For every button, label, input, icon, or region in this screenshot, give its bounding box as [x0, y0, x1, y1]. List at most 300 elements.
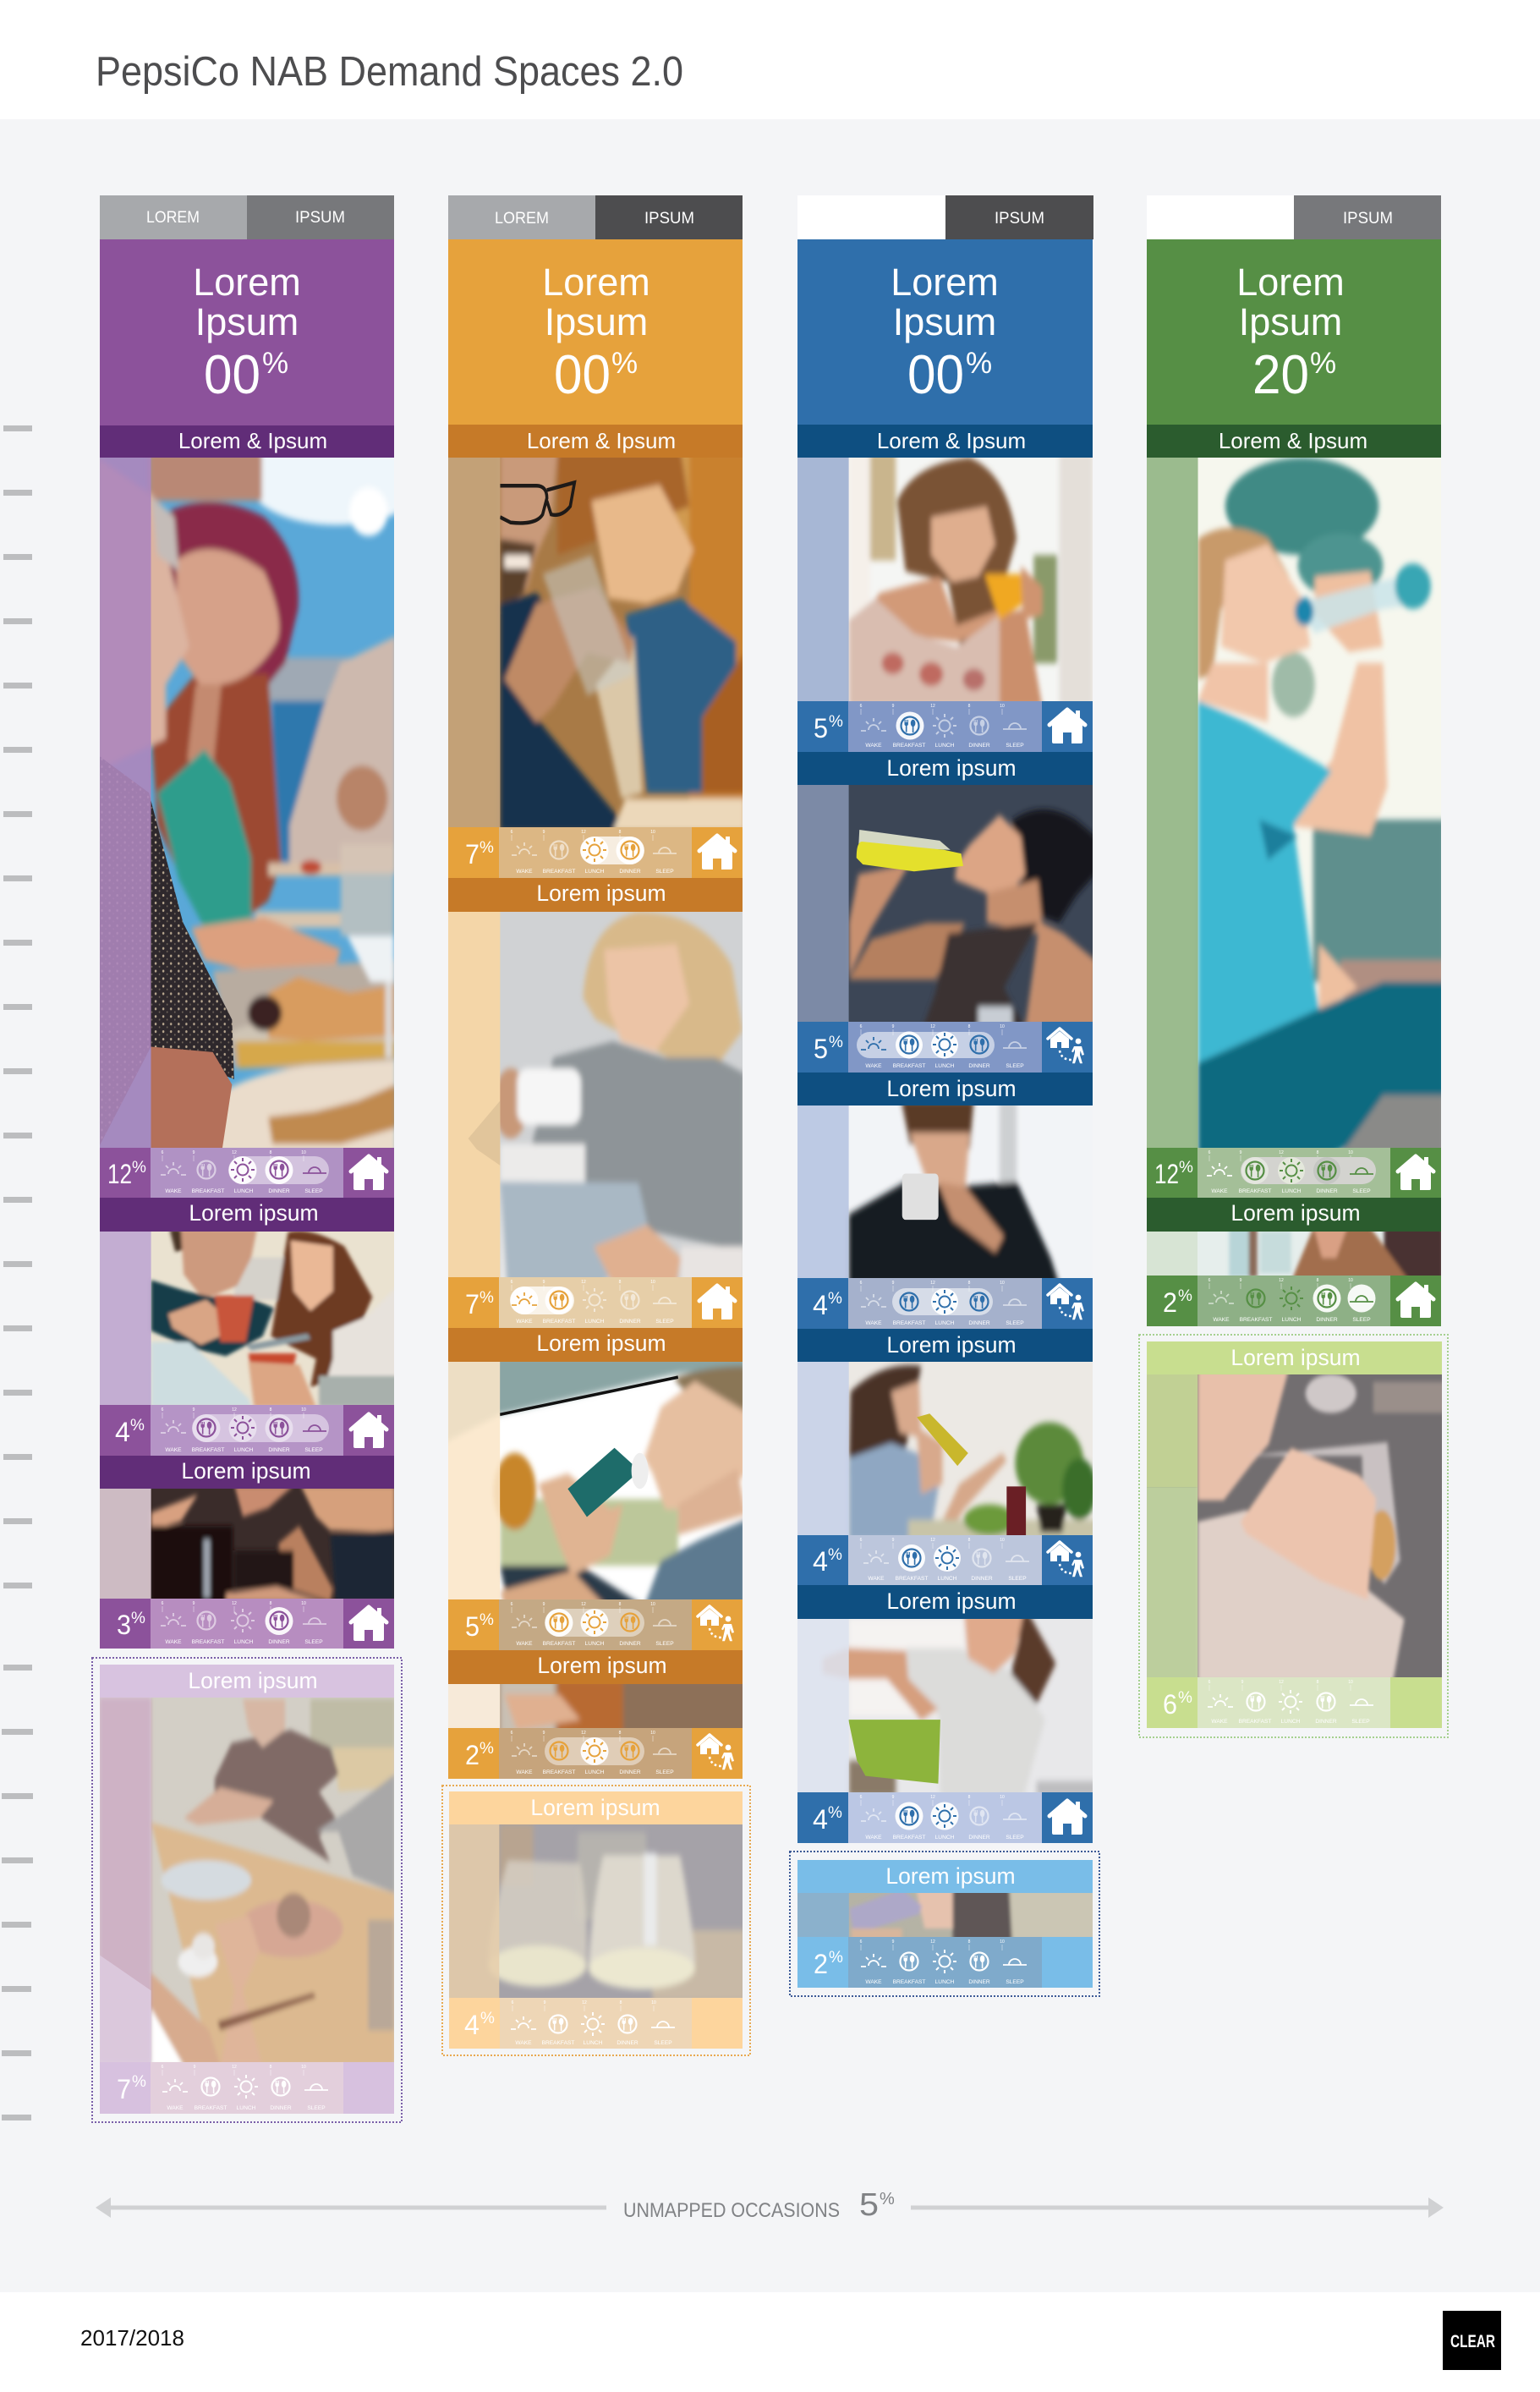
time bar 5%: DINNER: [968, 1063, 990, 1069]
time bar 5%: LUNCH: [585, 1641, 605, 1647]
time bar 7%: 7: [465, 1289, 480, 1319]
time bar 12%: 12: [232, 1150, 237, 1155]
time bar 5%: [448, 1599, 743, 1650]
time bar 2%: 8: [1317, 1278, 1319, 1283]
time bar 3%: LUNCH: [234, 1639, 254, 1645]
time bar 2%: 9: [543, 1731, 545, 1736]
sub heading band: Lorem & Ipsum: [178, 428, 327, 453]
time bar 7%: SLEEP: [655, 869, 674, 875]
time bar 5%: WAKE: [865, 1063, 882, 1069]
top band: Lorem ipsum: [1230, 1345, 1361, 1370]
time bar 7%: BREAKFAST: [543, 869, 575, 875]
band: [448, 1328, 743, 1362]
time bar 7%: SLEEP: [307, 2105, 326, 2111]
time bar 4%: [100, 1405, 394, 1456]
time bar 7%: 9: [194, 2065, 196, 2070]
time bar 4%: 9: [892, 1538, 895, 1543]
time bar 7%: 8: [619, 830, 622, 835]
time bar 5%: 9: [892, 704, 895, 709]
time bar 12%: 12: [1154, 1159, 1179, 1189]
band: [797, 1073, 1093, 1105]
time bar 4%: 8: [968, 1538, 971, 1543]
time bar 4%: 12: [930, 1795, 935, 1800]
time bar 5%: SLEEP: [1006, 1063, 1024, 1069]
time bar 4%: [797, 1535, 1093, 1585]
time bar 2%: 10: [650, 1731, 655, 1736]
band: [797, 752, 1093, 785]
time bar 7%: [448, 827, 743, 878]
top band: Lorem ipsum: [530, 1795, 660, 1820]
time bar 4%: LUNCH: [935, 1320, 955, 1326]
time bar 12%: LUNCH: [234, 1188, 254, 1194]
photo: iced drink in hand: [448, 1684, 743, 1728]
time bar 2%: LUNCH: [1282, 1317, 1302, 1323]
time bar 5%: 9: [543, 1602, 545, 1607]
arrow right: [911, 2197, 1444, 2218]
photo: woman in car with cup: [448, 1362, 743, 1599]
time bar 4%: LUNCH: [584, 2040, 603, 2046]
time bar 3%: SLEEP: [304, 1639, 323, 1645]
photo: woman with tablet and cup: [448, 912, 743, 1277]
top band: [100, 1665, 394, 1698]
top band: [1147, 1341, 1442, 1374]
time bar 7%: [100, 2062, 394, 2114]
time bar 5%: 12: [930, 704, 935, 709]
photo: woman drinking bottled water: [1147, 458, 1441, 1148]
heading block: 00: [907, 343, 964, 405]
time bar 4%: LUNCH: [938, 1576, 957, 1582]
time bar 4%: BREAKFAST: [893, 1835, 925, 1841]
time bar 2%: %: [829, 1949, 843, 1967]
time bar 4%: SLEEP: [304, 1447, 323, 1453]
time bar 7%: 6: [511, 1280, 513, 1285]
time bar 3%: 10: [301, 1601, 306, 1606]
unmapped occasions label: [623, 2187, 895, 2223]
top band: Lorem ipsum: [188, 1668, 318, 1693]
time bar 5%: [797, 701, 1093, 752]
band: Lorem ipsum: [536, 1330, 666, 1356]
time bar 7%: DINNER: [619, 1319, 641, 1325]
time bar 4%: 4: [813, 1804, 828, 1835]
sub heading band: [1147, 425, 1441, 458]
time bar 12%: [100, 1148, 394, 1198]
time bar 2%: DINNER: [1316, 1317, 1338, 1323]
time bar 4%: 12: [930, 1281, 935, 1286]
title: PepsiCo NAB Demand Spaces 2.0: [96, 49, 683, 95]
time bar 12%: DINNER: [268, 1188, 290, 1194]
time bar 6%: DINNER: [1315, 1719, 1337, 1725]
band: Lorem ipsum: [1230, 1200, 1361, 1226]
time bar 3%: 3: [117, 1610, 131, 1640]
band: Lorem ipsum: [886, 1332, 1017, 1358]
time bar 12%: 6: [162, 1150, 164, 1155]
time bar 2%: 8: [968, 1939, 971, 1945]
photo: cafe table: [100, 1698, 394, 2062]
time bar 3%: 9: [193, 1601, 195, 1606]
time bar 2%: [448, 1728, 743, 1779]
time bar 2%: %: [1178, 1287, 1192, 1305]
footer background: [0, 2292, 1540, 2392]
time bar 4%: BREAKFAST: [896, 1576, 928, 1582]
time bar 7%: 10: [650, 830, 655, 835]
photo: woman with orange juice: [797, 458, 1093, 701]
photo: wine glasses: [449, 1824, 743, 1998]
time bar 12%: [1147, 1148, 1441, 1198]
tabs: IPSUM: [295, 208, 345, 227]
time bar 4%: 10: [1000, 1538, 1005, 1543]
tabs: LOREM: [146, 208, 200, 227]
time bar 4%: BREAKFAST: [192, 1447, 224, 1453]
time bar 5%: 10: [1000, 1024, 1005, 1029]
time bar 5%: 12: [930, 1024, 935, 1029]
time bar 2%: [1147, 1276, 1441, 1326]
time bar 6%: BREAKFAST: [1239, 1719, 1271, 1725]
time bar 6%: 8: [1317, 1680, 1319, 1685]
time bar 7%: WAKE: [167, 2105, 184, 2111]
column 4: green: [1127, 195, 1451, 1737]
arrow left: [96, 2197, 606, 2218]
time bar 4%: 9: [544, 2000, 546, 2005]
time bar 12%: 9: [1240, 1150, 1242, 1155]
photo: man with glasses drinking water: [448, 458, 743, 827]
heading block: 20: [1252, 343, 1309, 405]
time bar 7%: 12: [581, 1280, 586, 1285]
time bar 7%: 9: [543, 830, 545, 835]
time bar 4%: 4: [813, 1290, 828, 1320]
time bar 4%: SLEEP: [1006, 1835, 1024, 1841]
time bar 2%: WAKE: [865, 1979, 882, 1985]
time bar 12%: 6: [1208, 1150, 1211, 1155]
time bar 4%: 4: [464, 2010, 480, 2040]
time bar 7%: %: [480, 1289, 494, 1307]
time bar 7%: 8: [619, 1280, 622, 1285]
time bar 12%: %: [132, 1159, 146, 1177]
time bar 6%: 6: [1208, 1680, 1211, 1685]
time bar 12%: BREAKFAST: [192, 1188, 224, 1194]
time bar 2%: BREAKFAST: [893, 1979, 925, 1985]
time bar 2%: 12: [581, 1731, 586, 1736]
time bar 12%: SLEEP: [304, 1188, 323, 1194]
time bar 4%: WAKE: [515, 2040, 532, 2046]
time bar 5%: 10: [1000, 704, 1005, 709]
time bar 4%: 10: [1000, 1795, 1005, 1800]
time bar 7%: 6: [511, 830, 513, 835]
time bar 7%: 12: [581, 830, 586, 835]
time bar 4%: LUNCH: [935, 1835, 955, 1841]
time bar 2%: WAKE: [1213, 1317, 1230, 1323]
footer year: 2017/2018: [80, 2325, 184, 2351]
time bar 2%: 9: [892, 1939, 895, 1945]
time bar 7%: LUNCH: [585, 1319, 605, 1325]
heading block: %: [611, 347, 638, 380]
time bar 5%: LUNCH: [935, 1063, 955, 1069]
time bar 12%: 10: [1348, 1150, 1353, 1155]
time bar 7%: LUNCH: [585, 869, 605, 875]
time bar 3%: [100, 1599, 394, 1649]
time bar 2%: BREAKFAST: [543, 1769, 575, 1775]
heading block: Ipsum: [1239, 300, 1342, 343]
column 3: blue: [780, 195, 1105, 1996]
time bar 6%: 10: [1348, 1680, 1353, 1685]
sub heading band: [100, 425, 394, 458]
tabs: [1147, 195, 1441, 239]
time bar 4%: WAKE: [165, 1447, 182, 1453]
time bar 2%: LUNCH: [935, 1979, 955, 1985]
band: [100, 1456, 394, 1489]
time bar 4%: 9: [892, 1281, 895, 1286]
time bar 5%: 12: [581, 1602, 586, 1607]
time bar 4%: 8: [968, 1795, 971, 1800]
time bar 3%: %: [131, 1610, 145, 1627]
time bar 7%: BREAKFAST: [195, 2105, 227, 2111]
column 1: purple: [85, 195, 426, 2122]
time bar 2%: DINNER: [619, 1769, 641, 1775]
heading block: [100, 239, 394, 425]
time bar 5%: 8: [968, 704, 971, 709]
time bar 12%: WAKE: [165, 1188, 182, 1194]
time bar 7%: WAKE: [516, 1319, 533, 1325]
time bar 4%: %: [828, 1290, 842, 1308]
time bar 4%: [797, 1792, 1093, 1843]
photo: couple with mugs: [100, 1232, 394, 1405]
time bar 7%: DINNER: [270, 2105, 292, 2111]
time bar 12%: 12: [1279, 1150, 1284, 1155]
unmapped occasions label: %: [880, 2190, 895, 2208]
column 2: orange: [425, 195, 766, 2055]
time bar 5%: %: [829, 713, 843, 731]
time bar 4%: WAKE: [868, 1576, 885, 1582]
time bar 4%: 10: [651, 2000, 656, 2005]
unmapped occasions label: 5: [859, 2187, 879, 2223]
time bar 4%: DINNER: [968, 1835, 990, 1841]
time bar 12%: 9: [193, 1150, 195, 1155]
time bar 4%: DINNER: [268, 1447, 290, 1453]
heading block: %: [1310, 347, 1336, 380]
time bar 2%: [797, 1937, 1093, 1988]
photo: friends with straws: [100, 1489, 394, 1599]
time bar 2%: 10: [1000, 1939, 1005, 1945]
band: [448, 878, 743, 912]
time bar 5%: 5: [465, 1611, 480, 1642]
time bar 12%: 8: [1317, 1150, 1319, 1155]
time bar 12%: 8: [270, 1150, 272, 1155]
dashed group: out of home: [1139, 1335, 1450, 1737]
time bar 6%: 9: [1241, 1680, 1244, 1685]
time bar 4%: 9: [892, 1795, 895, 1800]
time bar 2%: SLEEP: [655, 1769, 674, 1775]
time bar 5%: %: [829, 1034, 843, 1051]
top band: Lorem ipsum: [885, 1863, 1016, 1889]
time bar 5%: BREAKFAST: [543, 1641, 575, 1647]
dashed group: out of home: [440, 1786, 750, 2055]
time bar 4%: LUNCH: [234, 1447, 254, 1453]
time bar 4%: 12: [232, 1407, 237, 1413]
time bar 2%: 9: [1240, 1278, 1242, 1283]
heading block: Ipsum: [893, 300, 996, 343]
photo: woman pouring green smoothie: [797, 1619, 1093, 1792]
time bar 2%: 6: [511, 1731, 513, 1736]
time bar 4%: DINNER: [968, 1320, 990, 1326]
time bar 4%: 6: [512, 2000, 514, 2005]
time bar 4%: DINNER: [617, 2040, 638, 2046]
time bar 2%: DINNER: [968, 1979, 990, 1985]
time bar 7%: DINNER: [619, 869, 641, 875]
time bar 4%: [797, 1278, 1093, 1329]
band: [100, 1198, 394, 1232]
time bar 4%: 4: [115, 1417, 130, 1447]
band: Lorem ipsum: [189, 1200, 319, 1226]
time bar 5%: DINNER: [968, 743, 990, 749]
heading block: 00: [554, 343, 611, 405]
time bar 6%: LUNCH: [1281, 1719, 1301, 1725]
time bar 4%: 12: [582, 2000, 587, 2005]
sub heading band: Lorem & Ipsum: [1219, 428, 1367, 453]
sub heading band: Lorem & Ipsum: [877, 428, 1026, 453]
time bar 4%: BREAKFAST: [542, 2040, 574, 2046]
time bar 4%: WAKE: [865, 1835, 882, 1841]
time bar 2%: WAKE: [516, 1769, 533, 1775]
photo: woman with smoothie and plants: [797, 1362, 1093, 1535]
time bar 2%: 2: [814, 1949, 828, 1979]
time bar 7%: [448, 1277, 743, 1328]
time bar 5%: 9: [892, 1024, 895, 1029]
time bar 2%: 2: [465, 1740, 480, 1770]
top band: [797, 1860, 1093, 1893]
photo: dinner table: [100, 458, 394, 1148]
time bar 7%: WAKE: [516, 869, 533, 875]
time bar 4%: 10: [1000, 1281, 1005, 1286]
time bar 5%: WAKE: [516, 1641, 533, 1647]
time bar 4%: %: [828, 1804, 842, 1822]
band: Lorem ipsum: [181, 1458, 311, 1484]
time bar 5%: %: [480, 1611, 494, 1629]
band: [797, 1585, 1093, 1619]
time bar 5%: SLEEP: [655, 1641, 674, 1647]
top band: [449, 1791, 743, 1824]
sub heading band: Lorem & Ipsum: [527, 428, 676, 453]
time bar 4%: SLEEP: [654, 2040, 672, 2046]
tabs: [448, 195, 743, 239]
time bar 7%: %: [480, 839, 494, 857]
photo: woman with yellow sports drink: [797, 785, 1093, 1022]
time bar 7%: LUNCH: [237, 2105, 256, 2111]
time bar 4%: 9: [193, 1407, 195, 1413]
heading block: Ipsum: [545, 300, 648, 343]
time bar 7%: 10: [650, 1280, 655, 1285]
band: Lorem ipsum: [536, 881, 666, 906]
time bar 7%: 9: [543, 1280, 545, 1285]
heading block: [797, 239, 1093, 425]
time bar 2%: SLEEP: [1352, 1317, 1371, 1323]
time bar 5%: 10: [650, 1602, 655, 1607]
band: [1147, 1198, 1441, 1232]
tabs: [100, 195, 394, 239]
time bar 5%: BREAKFAST: [893, 743, 925, 749]
time bar 12%: SLEEP: [1352, 1188, 1371, 1194]
band: [448, 1650, 743, 1684]
time bar 5%: 6: [860, 704, 863, 709]
heading block: Lorem: [891, 261, 999, 304]
dashed group: out of home: [789, 1852, 1099, 1996]
time bar 2%: 10: [1348, 1278, 1353, 1283]
heading block: [1147, 239, 1441, 425]
time bar 7%: %: [132, 2073, 146, 2091]
time bar 4%: %: [480, 2010, 495, 2027]
sub heading band: [448, 425, 743, 458]
time bar 4%: 6: [162, 1407, 164, 1413]
dashed group: out of home: [85, 1658, 409, 2122]
heading block: Ipsum: [195, 300, 299, 343]
time bar 2%: 12: [1279, 1278, 1284, 1283]
time bar 7%: 7: [465, 839, 480, 870]
band: Lorem ipsum: [886, 1076, 1017, 1101]
band: Lorem ipsum: [886, 1588, 1017, 1614]
time bar 12%: 12: [107, 1159, 132, 1189]
time bar 5%: 8: [619, 1602, 622, 1607]
time bar 12%: WAKE: [1211, 1188, 1228, 1194]
time bar 3%: BREAKFAST: [192, 1639, 224, 1645]
time bar 7%: 6: [162, 2065, 164, 2070]
time bar 5%: 6: [511, 1602, 513, 1607]
time bar 6%: 6: [1163, 1689, 1177, 1720]
time bar 5%: 5: [814, 1034, 828, 1064]
time bar 3%: 8: [270, 1601, 272, 1606]
time bar 5%: BREAKFAST: [893, 1063, 925, 1069]
logo: CLEAR: [1443, 2311, 1501, 2370]
time bar 6%: SLEEP: [1351, 1719, 1370, 1725]
time bar 4%: %: [130, 1417, 145, 1435]
time bar 3%: WAKE: [165, 1639, 182, 1645]
header background: [0, 0, 1540, 119]
time bar 4%: 8: [620, 2000, 622, 2005]
time bar 7%: SLEEP: [655, 1319, 674, 1325]
tabs: IPSUM: [1343, 209, 1393, 228]
time bar 5%: DINNER: [619, 1641, 641, 1647]
time bar 4%: 6: [860, 1281, 863, 1286]
time bar 4%: SLEEP: [1008, 1576, 1027, 1582]
time bar 5%: [797, 1022, 1093, 1073]
photo: woman with protein shaker: [797, 1893, 1093, 1937]
sub heading band: [797, 425, 1093, 458]
band: Lorem ipsum: [537, 1653, 667, 1678]
heading block: 00: [204, 343, 260, 405]
heading block: [448, 239, 743, 425]
time bar 6%: WAKE: [1211, 1719, 1228, 1725]
heading block: Lorem: [542, 261, 650, 304]
time bar 4%: 8: [968, 1281, 971, 1286]
time bar 5%: 5: [814, 713, 828, 743]
time bar 4%: [449, 1998, 743, 2049]
time bar 3%: 6: [162, 1601, 164, 1606]
time bar 4%: 12: [930, 1538, 935, 1543]
photo: woman with tea: [1147, 1374, 1442, 1677]
time bar 4%: 4: [813, 1546, 828, 1577]
time bar 12%: %: [1179, 1159, 1193, 1177]
time bar 3%: DINNER: [268, 1639, 290, 1645]
time bar 2%: BREAKFAST: [1240, 1317, 1272, 1323]
time bar 4%: SLEEP: [1006, 1320, 1024, 1326]
time bar 2%: 6: [860, 1939, 863, 1945]
time bar 2%: %: [480, 1740, 494, 1758]
time bar 2%: LUNCH: [585, 1769, 605, 1775]
time bar 4%: 6: [860, 1538, 863, 1543]
time bar 7%: 7: [117, 2074, 131, 2104]
time bar 7%: 8: [270, 2065, 272, 2070]
time bar 3%: 12: [232, 1601, 237, 1606]
time bar 4%: 6: [860, 1795, 863, 1800]
time bar 5%: 6: [860, 1024, 863, 1029]
time bar 6%: 12: [1279, 1680, 1284, 1685]
